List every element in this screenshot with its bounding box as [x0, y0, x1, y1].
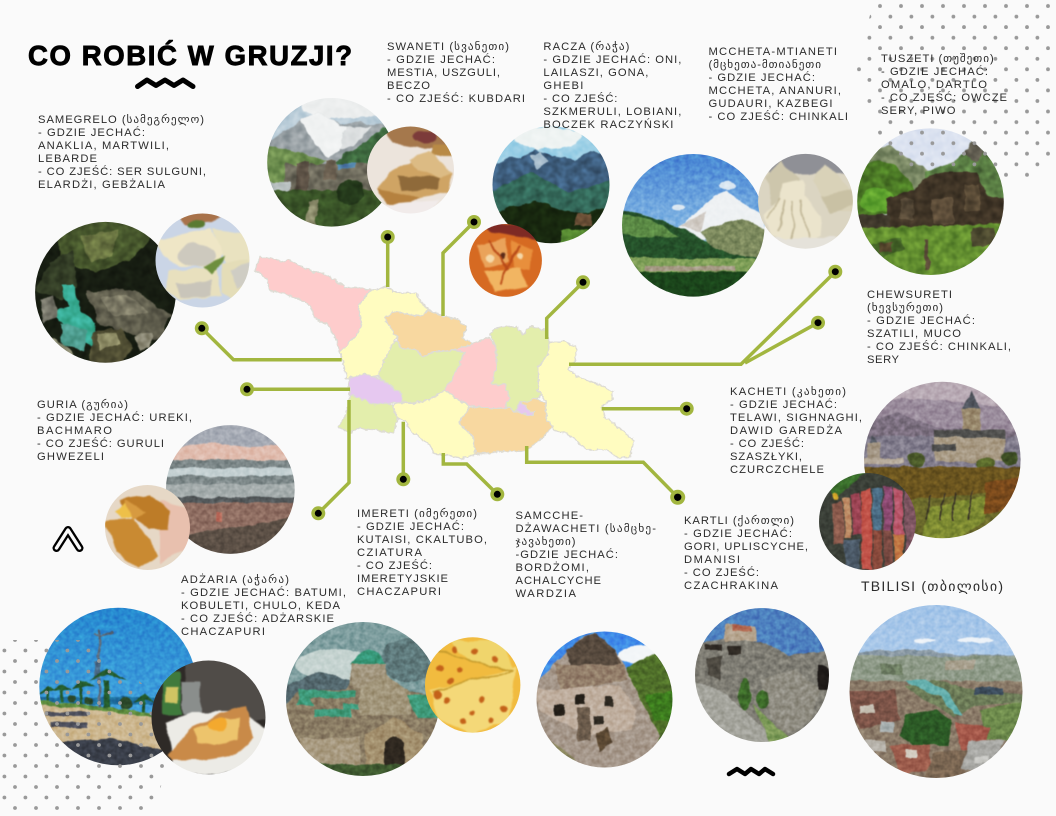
connector: Samegrelo	[195, 321, 342, 360]
photo: Samegrelo canyon	[35, 222, 176, 363]
text: Chewsureti: - GDZIE JECHAĆ:	[867, 314, 975, 327]
connector: Samcche-Dżawacheti	[443, 453, 504, 501]
text: Samcche-Dżawacheti: DŻAWACHETI (სამცხე-	[516, 522, 656, 535]
text: Racza: GHEBI	[543, 80, 583, 92]
photo: Racza food	[469, 224, 542, 297]
text: Adżaria: ADŻARIA (აჭარა)	[181, 573, 289, 586]
text: Mccheta-Mtianeti: - CO ZJEŚĆ: CHINKALI	[708, 110, 848, 123]
connector: Tuszeti	[569, 265, 842, 364]
text: Mccheta-Mtianeti: GUDAURI, KAZBEGI	[708, 98, 832, 110]
region: Tbilisi	[517, 402, 535, 416]
text: Tuszeti: OMALO, DARTLO	[881, 79, 987, 91]
text: Kacheti: - CO ZJEŚĆ:	[730, 437, 804, 450]
text: Chewsureti	[867, 289, 1011, 366]
text: Swaneti: - GDZIE JECHAĆ:	[387, 53, 495, 66]
zigzag under title	[138, 80, 193, 86]
photo: Kacheti, Alaverdi and vineyard	[864, 382, 1021, 538]
text: Samcche-Dżawacheti: ჯავახეთი)	[516, 536, 576, 548]
photo: Tuszeti towers	[857, 128, 1004, 275]
text: Tuszeti	[881, 53, 1007, 117]
text: Kacheti: SZASZŁYKI,	[730, 451, 802, 463]
text: Adżaria	[181, 573, 346, 638]
text: Adżaria: - CO ZJEŚĆ: ADŻARSKIE	[181, 612, 334, 625]
connector: Chewsureti	[745, 316, 825, 363]
photo: Guria food	[105, 485, 190, 570]
text: Imereti: CHACZAPURI	[357, 586, 441, 598]
text: Adżaria: - GDZIE JECHAĆ: BATUMI,	[181, 586, 346, 599]
text: Mccheta-Mtianeti: - GDZIE JECHAĆ:	[708, 71, 815, 84]
zigzag bottom	[729, 769, 773, 774]
text: Tbilisi heading: TBILISI (თბილისი)	[861, 578, 1003, 594]
region: Abchazja	[255, 257, 372, 353]
connector: Imereti	[396, 422, 410, 486]
dot pattern: top right	[857, 4, 1050, 177]
text: Samegrelo: - GDZIE JECHAĆ:	[38, 126, 145, 139]
text: Racza: - GDZIE JECHAĆ: ONI,	[543, 53, 681, 66]
text: Racza: LAILASZI, GONA,	[543, 67, 648, 79]
photo: Imereti food, chaczapuri	[425, 637, 520, 733]
text: Samcche-Dżawacheti: WARDZIA	[516, 588, 577, 600]
text: Imereti: - CO ZJEŚĆ:	[357, 559, 432, 572]
text: Mccheta-Mtianeti: MCCHETA, ANANURI,	[708, 85, 841, 97]
photo: Tbilisi panorama	[850, 605, 1022, 778]
text: Racza: SZKMERULI, LOBIANI,	[543, 106, 681, 118]
text: Kartli: - CO ZJEŚĆ:	[684, 566, 759, 579]
text: Imereti: CZIATURA	[357, 547, 423, 559]
icon: chevron	[56, 530, 80, 548]
region: Adżaria	[338, 395, 398, 433]
connector: Racza	[443, 215, 481, 316]
text: Racza	[543, 41, 681, 131]
text: Samegrelo	[38, 114, 206, 191]
connector: Kacheti	[602, 402, 694, 416]
text: Kartli: CZACHRAKINA	[684, 580, 779, 592]
text: Guria: GURIA (გურია)	[37, 399, 128, 411]
text: Samegrelo: SAMEGRELO (სამეგრელო)	[38, 114, 204, 126]
photo: Samcche-Dżawacheti, Wardzia	[536, 632, 672, 768]
text: Chewsureti: SERY	[867, 354, 900, 366]
text: Swaneti: - CO ZJEŚĆ: KUBDARI	[387, 92, 525, 105]
text: Tuszeti: - GDZIE JECHAĆ:	[881, 65, 988, 78]
connector: Guria	[240, 382, 350, 396]
text: Kartli: - GDZIE JECHAĆ:	[684, 527, 792, 540]
text: Guria	[37, 399, 192, 463]
text: Kartli: GORI, UPLISCYCHE,	[684, 541, 808, 553]
text: Tuszeti: TUSZETI (თუშეთი)	[881, 53, 994, 65]
text: Samegrelo: ANAKLIA, MARTWILI,	[38, 140, 169, 152]
text: Swaneti: SWANETI (სვანეთი)	[387, 41, 509, 53]
photo: Kartli, Uplistsikhe	[695, 608, 829, 742]
text: Racza: BOCZEK RACZYŃSKI	[543, 118, 673, 131]
text: Chewsureti: - CO ZJEŚĆ: CHINKALI,	[867, 340, 1011, 353]
photo: Samegrelo food	[156, 214, 250, 308]
text: Guria: GHWEZELI	[37, 451, 104, 463]
region: Guria	[348, 374, 402, 405]
text: Swaneti: MESTIA, USZGULI,	[387, 67, 500, 79]
region: Mccheta-Mtianeti south	[445, 337, 509, 408]
region: Samegrelo	[340, 287, 428, 378]
title: CO ROBIĆ W GRUZJI?	[28, 40, 352, 71]
text: Chewsureti: CHEWSURETI	[867, 289, 952, 301]
text: Kacheti: TELAWI, SIGHNAGHI,	[730, 412, 862, 424]
text: Racza: - CO ZJEŚĆ:	[543, 92, 617, 105]
text: Tuszeti: SERY, PIWO	[881, 105, 956, 117]
photo: Guria beach	[166, 425, 295, 554]
text: Kacheti	[730, 386, 862, 476]
text: Mccheta-Mtianeti: MCCHETA-MTIANETI	[708, 46, 837, 58]
text: Samcche-Dżawacheti: -GDZIE JECHAĆ:	[516, 548, 618, 561]
text: Kacheti: - GDZIE JECHAĆ:	[730, 398, 837, 411]
region: Samcche-Dżawacheti	[392, 390, 475, 458]
text: Imereti: - GDZIE JECHAĆ:	[357, 520, 464, 533]
photo: Khinkali	[758, 154, 853, 249]
text: Samcche-Dżawacheti: SAMCCHE-	[516, 510, 583, 522]
region: Racza	[385, 310, 473, 357]
photo: Kacheti food, czurczchele	[819, 473, 916, 570]
text: Kartli: KARTLI (ქართლი)	[684, 515, 794, 527]
dot pattern: bottom left	[2, 640, 164, 810]
text: Samegrelo: - CO ZJEŚĆ: SER SULGUNI,	[38, 165, 206, 178]
photo: Swaneti food	[367, 126, 454, 214]
text: Swaneti: BECZO	[387, 80, 430, 92]
text: Kartli: DMANISI	[684, 554, 740, 566]
region: Kacheti	[538, 342, 633, 458]
region: Imereti	[378, 342, 464, 403]
text: Samegrelo: ELARDŻI, GEBŻALIA	[38, 178, 166, 191]
text: Imereti: IMERETYJSKIE	[357, 573, 448, 585]
text: Samegrelo: LEBARDE	[38, 153, 97, 165]
text: Adżaria: CHACZAPURI	[181, 626, 265, 638]
text: Imereti: KUTAISI, CKALTUBO,	[357, 534, 487, 546]
text: Guria: - GDZIE JECHAĆ: UREKI,	[37, 411, 192, 424]
photo: Swaneti village	[267, 98, 388, 227]
text: Samcche-Dżawacheti: BORDŻOMI,	[516, 561, 589, 574]
text: Guria: BACHMARO	[37, 425, 112, 437]
map of Georgia	[255, 257, 633, 458]
connector: Swaneti	[381, 230, 395, 287]
text: Kacheti: CZURCZCHELE	[730, 464, 824, 476]
text: Chewsureti: (ხევსურეთი)	[867, 302, 943, 314]
photo: Imereti, Bagrati Cathedral	[286, 622, 438, 776]
text: Kartli	[684, 515, 808, 592]
photo: Mccheta-Mtianeti, Kazbegi	[622, 154, 765, 297]
text: Imereti: IMERETI (იმერეთი)	[357, 508, 477, 520]
text: Mccheta-Mtianeti	[708, 46, 848, 123]
text: Swaneti	[387, 41, 525, 105]
text: Kacheti: KACHETI (კახეთი)	[730, 386, 846, 398]
text: Guria: - CO ZJEŚĆ: GURULI	[37, 437, 164, 450]
region: Mccheta-Mtianeti north	[489, 326, 549, 412]
photo: Adżaria food	[152, 660, 266, 774]
connector: Mccheta-Mtianeti	[547, 275, 590, 339]
connector lines and location dots	[195, 215, 842, 520]
text: Chewsureti: SZATILI, MUCO	[867, 328, 961, 340]
text: Adżaria: KOBULETI, CHULO, KEDA	[181, 600, 341, 612]
text: Kacheti: DAWID GAREDŻA	[730, 424, 843, 437]
text: Samcche-Dżawacheti	[516, 510, 656, 600]
photo: Racza mountains	[492, 126, 610, 244]
text: Imereti	[357, 508, 487, 598]
text: Mccheta-Mtianeti: (მცხეთა-მთიანეთი	[708, 59, 821, 71]
photo: Adżaria promenade	[39, 608, 193, 766]
text: Tuszeti: - CO ZJEŚĆ: OWCZE	[881, 91, 1007, 104]
connector: Adżaria	[311, 400, 349, 520]
connector: Kartli	[527, 446, 685, 505]
text: Racza: RACZA (რაჭა)	[543, 41, 630, 53]
text: Samcche-Dżawacheti: ACHALCYCHE	[516, 575, 601, 587]
region: Kartli	[460, 398, 553, 454]
